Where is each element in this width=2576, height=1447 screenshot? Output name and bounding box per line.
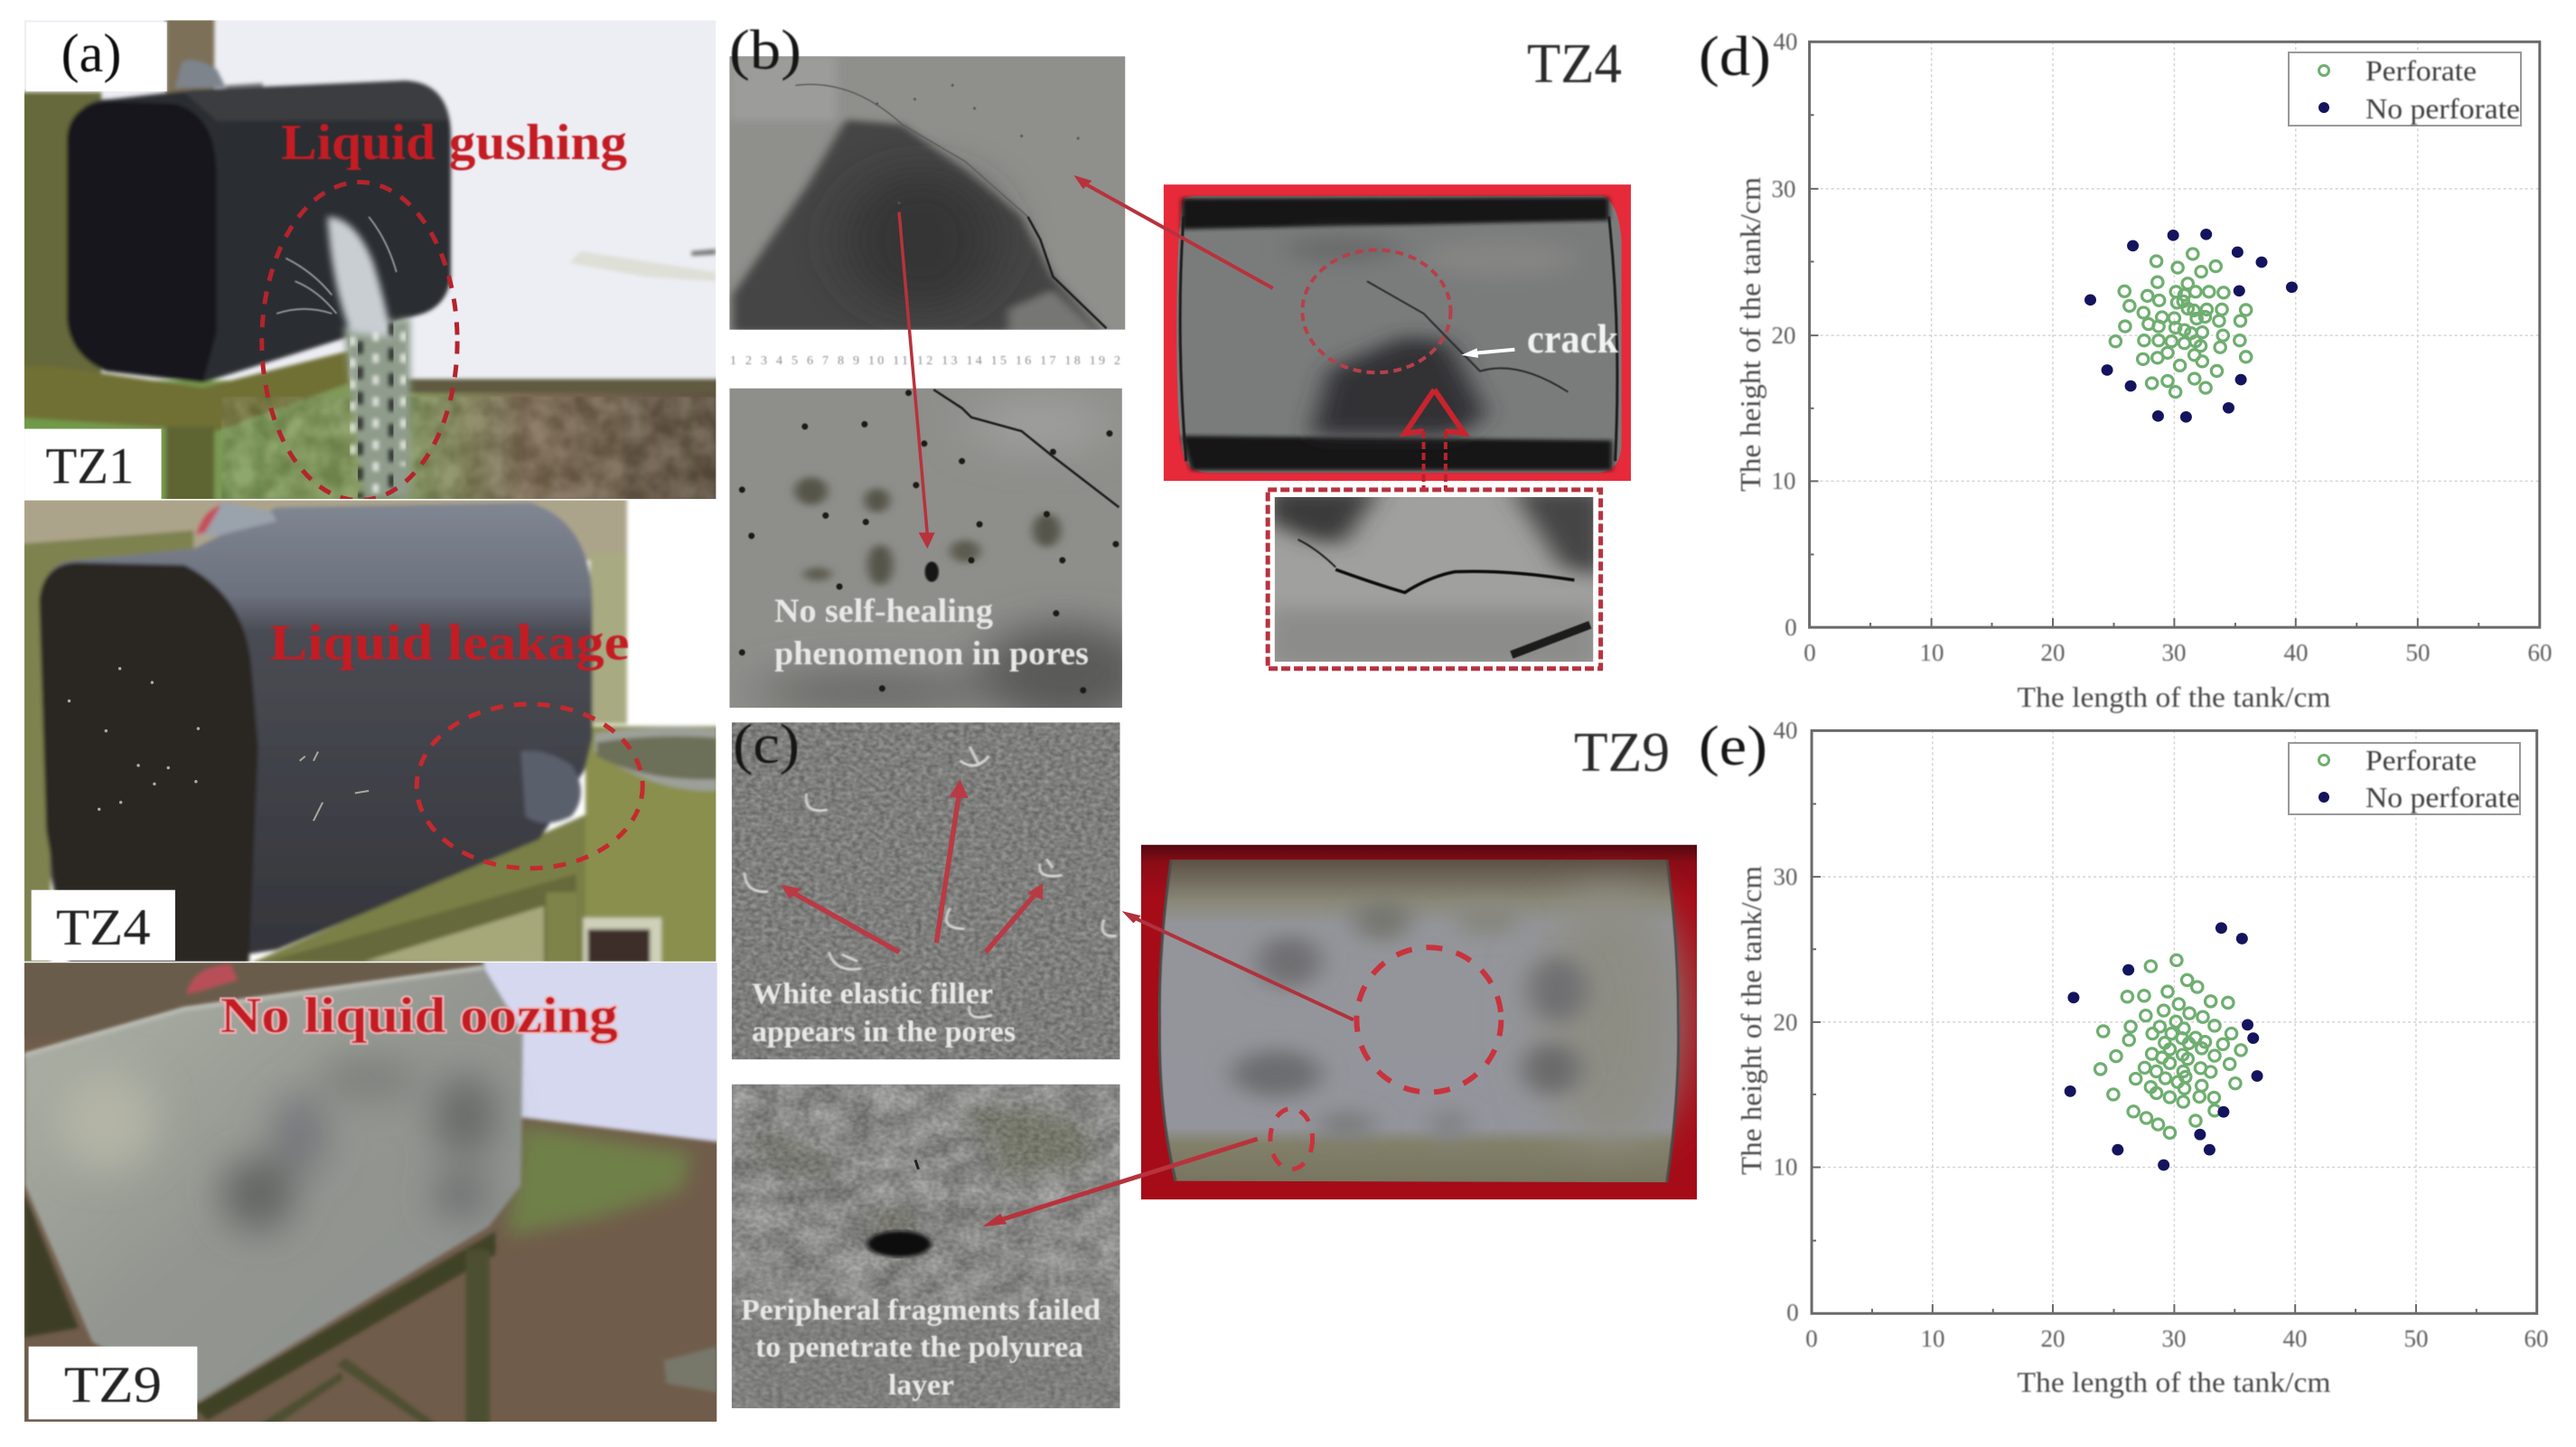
label: TZ9	[29, 1347, 197, 1419]
axis title x d: The length of the tank/cm	[2017, 681, 2331, 713]
callout: Liquid gushing: Liquid gushing	[281, 115, 627, 171]
arrow: hollow dashed up arrow	[1405, 390, 1465, 491]
photo: TZ9 tank in red frame	[1141, 845, 1697, 1199]
label: (c): (c)	[733, 714, 800, 775]
label: TZ9: TZ9	[64, 1357, 162, 1414]
text: peripheral fragments caption	[741, 1294, 1101, 1402]
callout: No liquid oozing: No liquid oozing	[220, 988, 618, 1044]
axis ticks d: 30	[1771, 175, 1796, 202]
label: (a)	[26, 22, 167, 91]
heading: TZ4: TZ4	[1527, 33, 1622, 95]
text: white elastic filler caption	[752, 978, 1016, 1048]
text: peripheral fragments caption: Peripheral fragments failed	[741, 1294, 1101, 1327]
axis ticks d: 30	[2161, 639, 2187, 666]
text: no self-healing caption: No self-healing	[774, 593, 994, 630]
axis ticks e: 40	[2282, 1325, 2308, 1352]
legend e: Perforate	[2365, 744, 2477, 776]
axis ticks d: 10	[1771, 467, 1796, 494]
axis title x e: The length of the tank/cm	[2017, 1366, 2331, 1398]
axis ticks d: 40	[1773, 28, 1798, 55]
chart e: TZ9 scatter	[1699, 716, 2548, 1398]
axis ticks e: 10	[1773, 1153, 1798, 1180]
axis ticks e	[1773, 717, 2548, 1352]
axis ticks d: 60	[2528, 639, 2552, 666]
text: no self-healing caption	[774, 593, 1089, 672]
heading: TZ9: TZ9	[1574, 722, 1670, 784]
axis ticks e: 60	[2524, 1325, 2548, 1352]
legend e: No perforate	[2365, 781, 2520, 813]
arrows: pointing to filled pores	[781, 779, 1044, 952]
plot frame, grid and points e	[1812, 730, 2537, 1313]
text: peripheral fragments caption: to penetrate the polyurea	[755, 1331, 1083, 1364]
photo: crack detail in dashed box	[1267, 489, 1606, 669]
photo: TZ4 crack close-up	[729, 56, 1125, 332]
label: TZ1	[24, 428, 162, 499]
label: crack: crack	[1527, 315, 1618, 362]
arrow: crack close-up to pore close-up	[899, 212, 935, 549]
axis ticks d: 0	[1784, 614, 1797, 641]
photo: TZ4 tank in red frame	[1164, 184, 1631, 481]
chart d: TZ4 scatter	[1699, 26, 2552, 713]
photo: TZ9 no liquid oozing	[18, 959, 724, 1425]
label: TZ1: TZ1	[46, 438, 134, 495]
axis title y e: The height of the tank/cm	[1735, 866, 1767, 1175]
axis ticks e: 40	[1773, 717, 1798, 744]
ruler scale: 1 2 3 4 5 6 7 8 9 10 11 12 13 14 15 16 17 18 19 2	[730, 354, 1120, 368]
axis ticks d: 20	[1771, 322, 1796, 349]
photo: TZ9 pores with white filler	[732, 722, 1120, 1059]
axis title y d: The height of the tank/cm	[1734, 177, 1766, 492]
label: TZ4	[32, 890, 175, 961]
label: (a): (a)	[61, 23, 121, 84]
plot frame, grid and points d	[1810, 42, 2540, 627]
axis ticks e: 0	[1805, 1325, 1818, 1352]
label: (e): (e)	[1699, 716, 1767, 777]
arrow: white arrow to crack	[1461, 348, 1514, 358]
photo: TZ1 liquid gushing	[18, 14, 724, 505]
photo: TZ9 fragment impact	[732, 1085, 1120, 1410]
axis ticks d	[1771, 28, 2552, 666]
arrow: TZ9 panel to filler close-up	[1122, 911, 1354, 1019]
panel c: TZ9 surface close-ups	[732, 714, 1697, 1410]
label: TZ4: TZ4	[56, 899, 151, 956]
legend d	[2289, 52, 2521, 126]
text: white elastic filler caption: appears in the pores	[752, 1016, 1016, 1048]
axis ticks e: 10	[1921, 1325, 1944, 1352]
photo: TZ4 liquid leakage	[18, 495, 724, 968]
axis ticks e: 20	[1773, 1009, 1798, 1036]
axis ticks e: 30	[1773, 863, 1798, 890]
axis ticks d: 0	[1803, 639, 1816, 666]
arrow: TZ4 panel to crack close-up	[1073, 175, 1273, 288]
axis ticks d: 40	[2284, 639, 2308, 666]
photo: TZ4 pore close-up	[729, 389, 1122, 709]
axis ticks e: 50	[2403, 1325, 2429, 1352]
text: peripheral fragments caption: layer	[888, 1369, 954, 1402]
label: (b): (b)	[729, 20, 801, 81]
legend e	[2289, 743, 2520, 814]
axis ticks d: 20	[2040, 639, 2065, 666]
label: (d): (d)	[1699, 26, 1771, 88]
panel a: field test photographs	[18, 14, 724, 1425]
legend d: No perforate	[2365, 92, 2520, 125]
arrow: TZ9 panel to fragment impact	[982, 1139, 1258, 1226]
axis ticks d: 10	[1919, 639, 1944, 666]
axis ticks e: 20	[2040, 1325, 2065, 1352]
legend d: Perforate	[2365, 54, 2477, 87]
axis ticks e: 30	[2161, 1325, 2187, 1352]
panel b: TZ4 surface close-ups	[729, 20, 1631, 724]
text: no self-healing caption: phenomenon in pores	[774, 635, 1089, 672]
callout: Liquid leakage: Liquid leakage	[269, 615, 629, 672]
text: white elastic filler caption: White elastic filler	[752, 978, 993, 1010]
axis ticks e: 0	[1786, 1299, 1799, 1326]
axis ticks d: 50	[2405, 639, 2431, 666]
